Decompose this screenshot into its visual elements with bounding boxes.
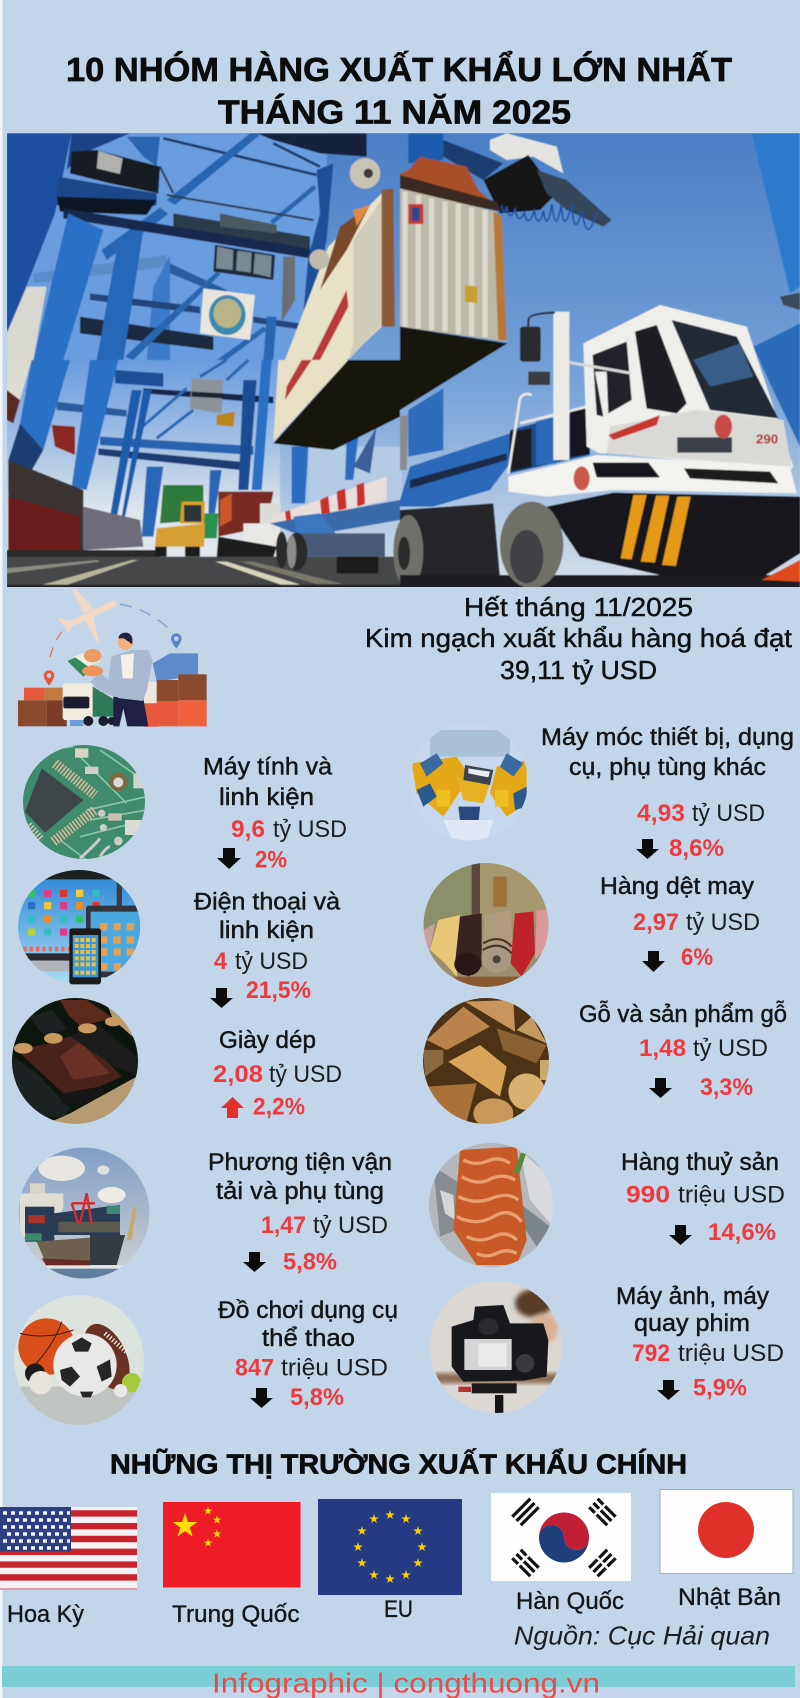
source: Nguồn: Cục Hải quan	[514, 1620, 770, 1650]
value: tỷ USD	[269, 1061, 342, 1088]
flag: Japan	[660, 1490, 793, 1574]
arrow down	[250, 1388, 273, 1408]
heading: main export markets: NHỮNG THỊ TRƯỜNG XUẤT KHẨU CHÍNH	[110, 1448, 687, 1480]
flag: European Union	[318, 1499, 462, 1595]
label: Hàng thuỷ sản	[621, 1149, 779, 1176]
image: split logs	[422, 997, 550, 1128]
flag: United States	[0, 1507, 137, 1590]
market labels	[7, 1584, 781, 1628]
footer bar: Infographic | congthuong.vn	[212, 1668, 600, 1698]
arrow up	[221, 1097, 244, 1118]
change: 2%	[255, 846, 287, 874]
value: 9,6	[231, 816, 265, 843]
value	[261, 1212, 388, 1239]
summary text: Hết tháng 11/2025	[464, 592, 693, 622]
change: 5,9%	[693, 1374, 747, 1402]
arrow down	[657, 1380, 680, 1400]
container long side	[285, 158, 395, 360]
title: 10 NHÓM HÀNG XUẤT KHẨU LỚN NHẤT	[66, 51, 732, 88]
arrow down	[210, 988, 233, 1008]
image: camera on tripod	[428, 1279, 563, 1414]
label: Hàng dệt may	[600, 873, 754, 900]
arrow down	[669, 1225, 692, 1245]
label: Máy tính và	[203, 754, 333, 780]
value: 2,08	[213, 1061, 263, 1088]
value	[637, 800, 765, 827]
value	[213, 1061, 342, 1088]
footer bar	[2, 1666, 795, 1698]
illustration: logistics worker	[18, 588, 207, 727]
label: Điện thoại và	[194, 888, 341, 916]
label: Máy ảnh, máy	[616, 1283, 769, 1310]
value: tỷ USD	[686, 909, 760, 936]
item: computers and components	[20, 743, 347, 874]
label: Máy móc thiết bị, dụng	[541, 724, 794, 751]
item: toys and sports equipment: thể thao	[262, 1325, 355, 1352]
value	[639, 1035, 768, 1062]
value: tỷ USD	[235, 948, 308, 975]
change: 21,5%	[246, 977, 311, 1004]
value	[626, 1182, 785, 1208]
value: 847	[235, 1354, 274, 1382]
summary text: Kim ngạch xuất khẩu hàng hoá đạt	[365, 623, 793, 653]
market labels: EU	[384, 1596, 413, 1623]
upper right: crane head and container front	[400, 133, 800, 360]
right side blue columns	[308, 447, 402, 503]
value: tỷ USD	[313, 1212, 388, 1239]
image: fabric rolls	[422, 862, 550, 988]
value: triệu USD	[281, 1354, 388, 1382]
item: machinery: cụ, phụ tùng khác	[569, 754, 766, 781]
label: Phương tiện vận	[208, 1149, 392, 1176]
road	[7, 557, 400, 590]
item: vehicles and parts: tải và phụ tùng	[216, 1178, 384, 1205]
summary text: 39,11 tỷ USD	[500, 655, 657, 685]
item: machinery	[408, 722, 794, 862]
item: cameras: quay phim	[634, 1310, 750, 1337]
change: 2,2%	[253, 1094, 305, 1120]
change: 5,8%	[283, 1248, 337, 1276]
arrow down	[642, 951, 665, 972]
change: 5,8%	[290, 1384, 344, 1411]
item: phones and components: linh kiện	[219, 917, 314, 944]
summary text	[365, 592, 793, 685]
market labels: Hoa Kỳ	[7, 1601, 84, 1628]
value	[235, 1354, 388, 1382]
label: Gỗ và sản phẩm gỗ	[579, 1001, 787, 1028]
crane structure upper left	[7, 133, 367, 360]
item: phones and components	[18, 870, 341, 1008]
image: circuit board	[20, 743, 148, 863]
change: 3,3%	[700, 1074, 753, 1101]
value: 4	[214, 948, 228, 975]
market labels: Hàn Quốc	[516, 1588, 624, 1615]
item: footwear	[10, 997, 342, 1127]
item: vehicles and parts	[17, 1147, 392, 1280]
flight path	[49, 604, 168, 662]
truck	[63, 683, 116, 726]
item: computers and components: linh kiện	[219, 784, 314, 811]
value	[231, 816, 347, 843]
market labels: Nhật Bản	[678, 1584, 781, 1611]
image: sports balls	[13, 1293, 147, 1427]
value: 4,93	[637, 800, 685, 827]
red white barrier	[270, 477, 387, 528]
label: Đồ chơi dụng cụ	[218, 1297, 398, 1324]
item: seafood	[427, 1142, 785, 1268]
change: 8,6%	[669, 835, 724, 862]
value	[633, 909, 760, 936]
item: cameras	[428, 1279, 784, 1414]
label: Giày dép	[219, 1027, 316, 1054]
value	[632, 1340, 784, 1367]
image: container ship	[17, 1147, 150, 1280]
flag: South Korea	[491, 1493, 631, 1581]
item: wood products	[422, 997, 787, 1128]
item: toys and sports equipment	[13, 1293, 398, 1427]
arrow down	[217, 848, 241, 869]
change: 6%	[681, 944, 713, 971]
terminal truck	[393, 305, 800, 590]
value: 990	[626, 1182, 670, 1208]
change: 14,6%	[708, 1219, 776, 1246]
map pins	[44, 633, 182, 686]
arrow down	[649, 1078, 672, 1098]
value: 792	[632, 1340, 670, 1367]
value: tỷ USD	[693, 1035, 768, 1062]
container underside continuation	[273, 360, 400, 450]
value: 1,47	[261, 1212, 306, 1239]
containers	[18, 653, 207, 727]
value: 1,48	[639, 1035, 686, 1062]
value: triệu USD	[678, 1340, 784, 1367]
crane structure lower left	[7, 360, 402, 590]
image: shrimp and fish	[427, 1142, 555, 1268]
value: 2,97	[633, 909, 679, 936]
photo: container port with crane and terminal truck	[7, 133, 800, 590]
image: leather shoes	[10, 997, 140, 1127]
person	[67, 633, 153, 726]
terminal truck: 290	[756, 431, 778, 446]
plane	[57, 588, 117, 642]
market labels: Trung Quốc	[172, 1601, 300, 1628]
value: tỷ USD	[273, 816, 347, 843]
image: devices	[18, 870, 141, 984]
value: triệu USD	[678, 1182, 785, 1208]
title	[66, 51, 732, 130]
arrow down	[636, 839, 659, 859]
image: robot assembly line	[412, 730, 527, 840]
arrow down	[243, 1252, 266, 1272]
flag: China	[163, 1502, 300, 1588]
title: THÁNG 11 NĂM 2025	[218, 94, 571, 130]
value: tỷ USD	[692, 800, 765, 827]
item: textiles	[422, 862, 760, 988]
